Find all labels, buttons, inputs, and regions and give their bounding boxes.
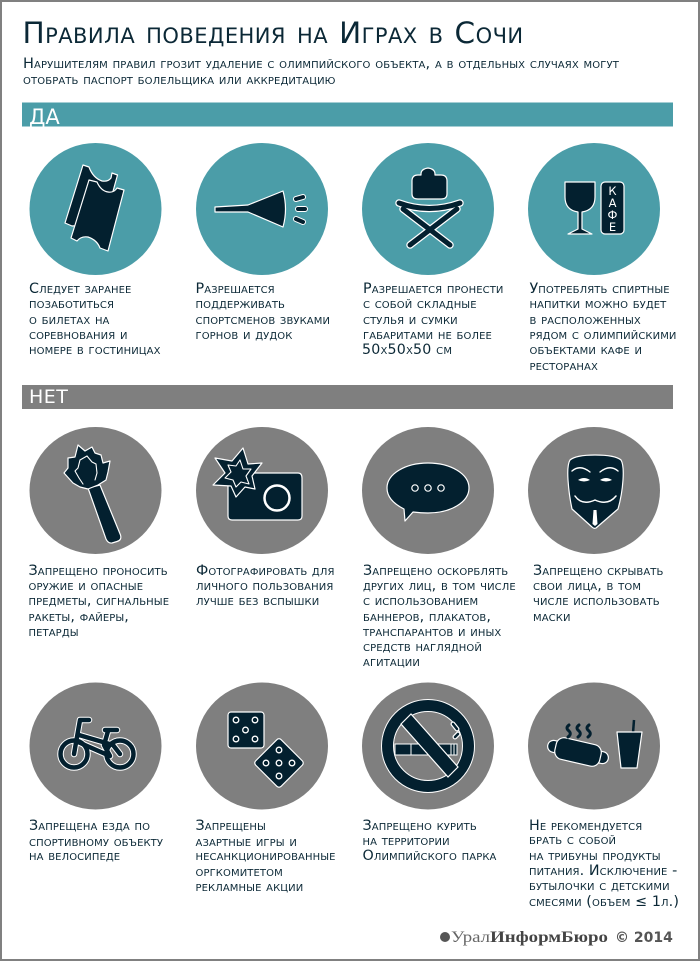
panel: mask	[528, 427, 664, 625]
icon: horn	[215, 191, 305, 227]
caption: с собой складные	[363, 296, 477, 312]
icon: bicycle	[60, 720, 134, 768]
caption: в расположенных	[530, 312, 641, 328]
caption: несанкционированные	[196, 848, 336, 864]
icon: wine glass and cafe sign: К	[608, 184, 617, 198]
section heading: НЕТ	[22, 385, 673, 409]
icon: wine glass and cafe sign: Ф	[608, 208, 618, 222]
panel: camera	[196, 427, 335, 609]
section heading: ДА	[22, 102, 673, 129]
caption	[362, 563, 516, 670]
icon: wine glass and cafe sign: А	[609, 196, 617, 210]
subtitle	[23, 56, 620, 88]
caption	[362, 281, 504, 358]
title: Правила поведения на Играх в Сочи	[22, 16, 524, 50]
caption: Запрещено оскорблять	[363, 563, 508, 579]
caption: спортсменов звуками	[196, 312, 330, 328]
caption: Запрещена езда по	[29, 818, 150, 834]
panel: torch	[28, 427, 169, 640]
caption: транспарантов и иных	[362, 624, 501, 640]
panel: no smoking	[362, 682, 497, 864]
caption	[196, 818, 336, 895]
caption: соревнования и	[29, 327, 128, 343]
panel: tickets	[29, 143, 162, 358]
caption: других лиц, в том числе	[363, 578, 516, 594]
caption: Разрешается	[196, 281, 275, 297]
footer credit: © 2014	[615, 930, 673, 946]
caption	[29, 281, 161, 358]
caption: габаритами не более	[363, 327, 492, 343]
icon: tickets	[65, 165, 124, 251]
icon: speech bubble	[387, 463, 469, 521]
caption: смесями (объем ≤ 1л.)	[529, 894, 679, 910]
icon: wine glass and cafe sign	[565, 182, 624, 234]
caption	[196, 563, 335, 609]
caption: Запрещено скрывать	[533, 563, 664, 579]
caption: Фотографировать для	[196, 563, 335, 579]
caption: маски	[533, 609, 571, 625]
caption: личного пользования	[196, 578, 333, 594]
panel: cafe	[528, 143, 677, 374]
caption: свои лица, в том	[533, 578, 641, 594]
panel: folding chair and bag	[362, 143, 504, 358]
footer credit: Урал ИнформБюро	[451, 929, 608, 946]
section heading: НЕТ: НЕТ	[29, 386, 68, 408]
panel: bicycle	[29, 682, 163, 864]
caption	[529, 818, 679, 910]
caption: агитации	[363, 654, 420, 670]
caption: с использованием	[363, 593, 478, 609]
caption: спортивному объекту	[29, 834, 163, 850]
caption: оружие и опасные	[28, 578, 143, 594]
caption: питания. Исключение -	[529, 863, 677, 879]
caption: на территории	[362, 833, 450, 849]
panel: dice	[196, 682, 336, 895]
caption: рекламные акции	[196, 879, 303, 895]
section heading: ДА: ДА	[29, 105, 60, 129]
caption: петарды	[28, 624, 79, 640]
icon: camera with flash	[213, 448, 302, 520]
icon: wine glass and cafe sign: Е	[609, 220, 616, 234]
caption: рядом с олимпийскими	[530, 327, 677, 343]
caption: 50х50х50 см	[362, 342, 452, 358]
caption: позаботиться	[29, 296, 114, 312]
caption: на велосипеде	[29, 848, 120, 864]
caption: баннеров, плакатов,	[363, 609, 491, 625]
caption: Запрещено курить	[362, 818, 477, 834]
caption: напитки можно будет	[530, 296, 667, 312]
panel: food	[528, 682, 679, 910]
caption: ресторанах	[530, 358, 598, 374]
caption: лучше без вспышки	[196, 593, 319, 609]
caption	[530, 281, 677, 374]
icon: mask	[568, 455, 623, 528]
caption: горнов и дудок	[196, 327, 292, 343]
caption: Запрещено проносить	[28, 563, 168, 579]
caption: Запрещены	[196, 818, 266, 834]
caption: брать с собой	[529, 832, 616, 848]
subtitle: Нарушителям правил грозит удаление с олимпийского объекта, а в отдельных случаях могут	[23, 56, 620, 72]
caption: стулья и сумки	[363, 312, 458, 328]
caption: на трибуны продукты	[529, 848, 661, 864]
caption: объектами кафе и	[530, 342, 642, 358]
caption	[533, 563, 664, 625]
caption: ракеты, файеры,	[28, 609, 129, 625]
panel: horn	[196, 143, 330, 343]
icon: no smoking sign	[388, 706, 468, 786]
caption: поддерживать	[196, 296, 285, 312]
caption	[29, 818, 163, 864]
caption: о билетах на	[29, 312, 110, 328]
caption: оргкомитетом	[196, 864, 283, 880]
caption: Разрешается пронести	[363, 281, 504, 297]
caption: Следует заранее	[29, 281, 131, 297]
caption: Не рекомендуется	[529, 818, 642, 834]
icon: hot dog, steam and cup	[546, 720, 642, 768]
subtitle: отобрать паспорт болельщика или аккредитацию	[23, 72, 336, 88]
caption: Олимпийского парка	[362, 848, 497, 864]
caption	[28, 563, 169, 640]
caption: Употреблять спиртные	[530, 281, 670, 297]
icon: dice	[228, 712, 304, 788]
caption: средств наглядной	[363, 639, 482, 655]
caption	[196, 281, 330, 343]
caption: предметы, сигнальные	[28, 593, 169, 609]
footer credit	[440, 929, 673, 946]
caption: азартные игры и	[196, 834, 297, 850]
caption: номере в гостиницах	[29, 342, 161, 358]
caption: числе использовать	[533, 593, 660, 609]
icon: chair and bag	[399, 168, 460, 245]
panel: speech bubble	[362, 427, 516, 670]
caption	[362, 818, 497, 864]
icon: torch	[64, 445, 121, 543]
caption: бутылочки с детскими	[529, 878, 670, 894]
